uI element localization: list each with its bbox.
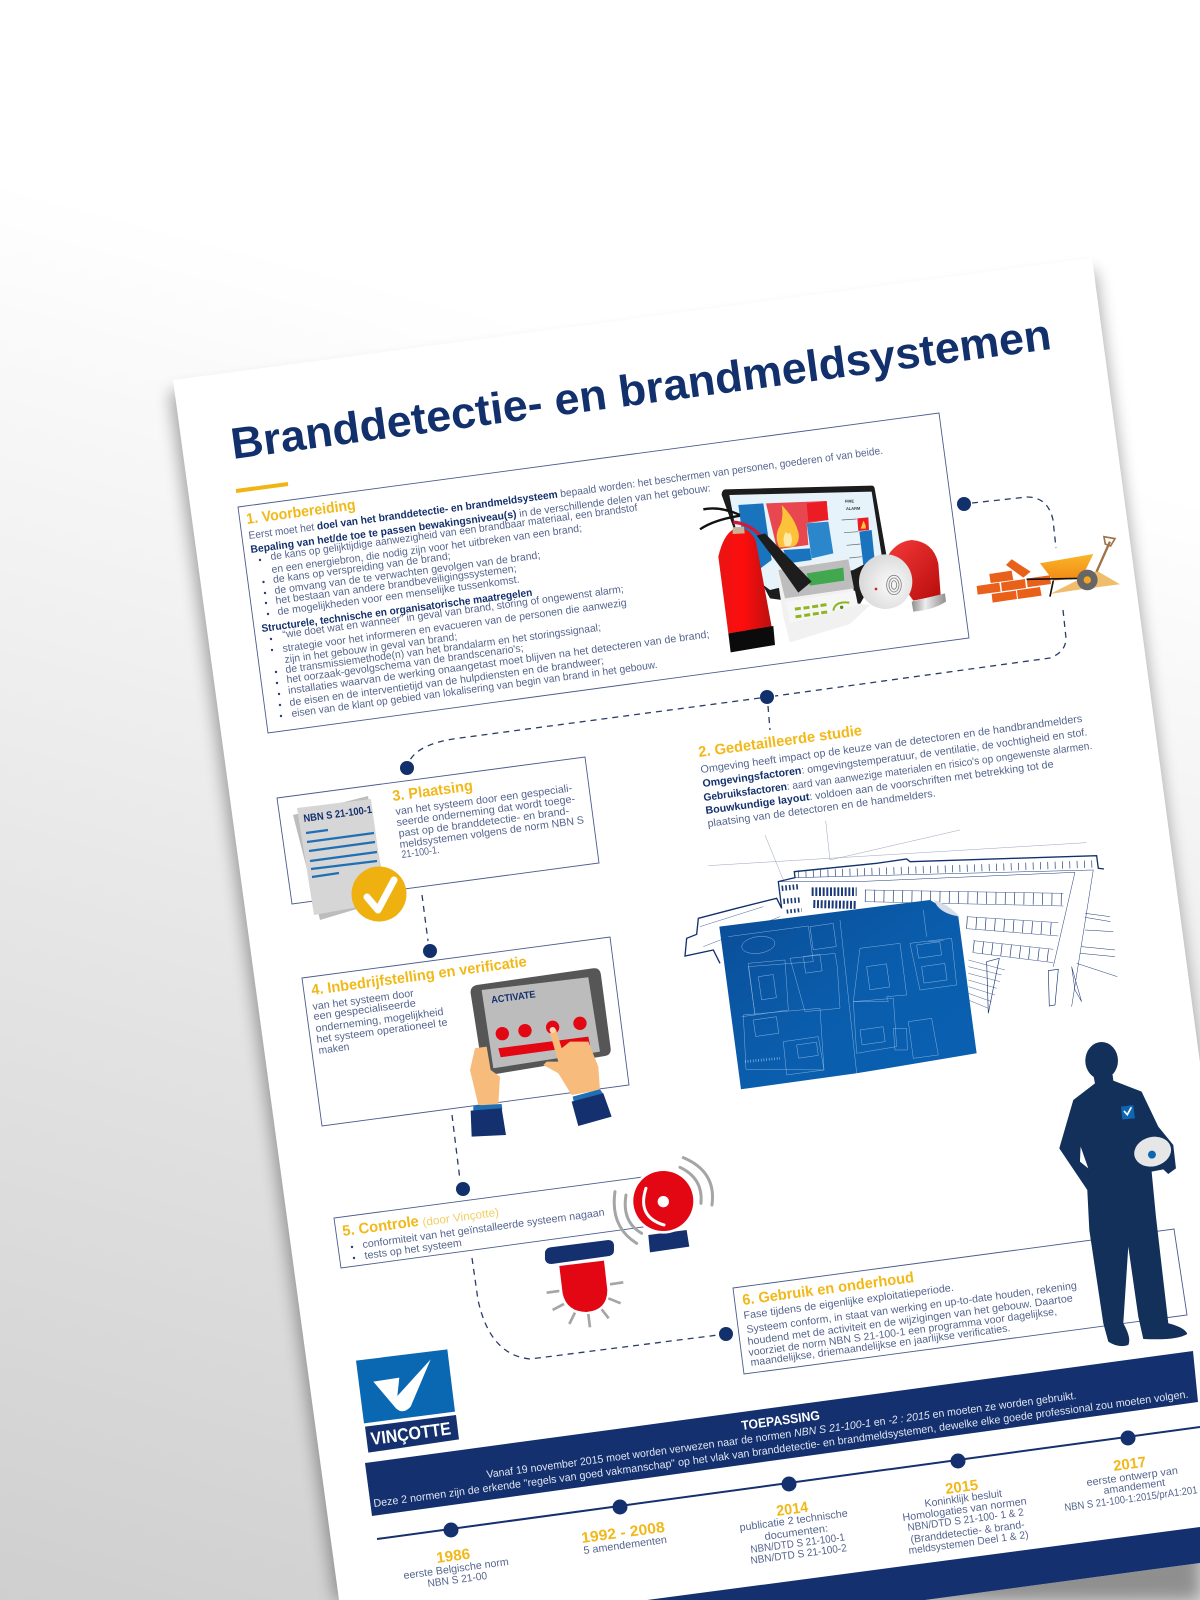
body text 3: van het systeem door een gespeciali-	[395, 782, 573, 818]
body text 1: eisen van de klant op gebied van lokalisering van begin van brand in het gebouw.	[291, 659, 658, 720]
milestone 2017: 2017	[1112, 1454, 1147, 1475]
milestone 2015	[902, 1454, 1029, 1557]
milestone 1992-2008	[580, 1500, 668, 1557]
icon: norm document with check: NBN S 21-100-1	[303, 804, 373, 825]
body text 3: 21-100-1.	[401, 844, 440, 861]
illustration: alarm monitor, extinguisher, keypad, detector, beacon: FIRE	[845, 498, 854, 504]
title: Branddetectie- en brandmeldsystemen	[228, 310, 1054, 469]
body text 6: Fase tijdens de eigenlijke exploitatieperiode.	[743, 1282, 955, 1322]
connector: step 5 to 6	[472, 1258, 718, 1359]
milestone 2014: documenten:	[764, 1523, 829, 1543]
icon: red beacon	[545, 1240, 623, 1327]
panel: 2 Gedetailleerde studie	[685, 713, 1117, 1089]
heading 3: 3. Plaatsing	[391, 777, 474, 805]
body text 1	[248, 445, 884, 720]
body text 4: een gespecialiseerde	[313, 997, 417, 1023]
poster sheet	[173, 258, 1200, 1600]
milestone 2015: 2015	[944, 1477, 979, 1498]
poster shadow	[170, 270, 1200, 1600]
connector: step 4 to 5	[452, 1115, 460, 1180]
body text 3	[395, 782, 585, 861]
icon: hands on tablet	[470, 968, 612, 1137]
body text 5: tests op het systeem	[364, 1237, 463, 1262]
body text 2: Omgeving heeft impact op de keuze van de detectoren en de handbrandmelders	[700, 713, 1083, 776]
milestone 2017: amandement	[1103, 1477, 1166, 1497]
node: step 5	[456, 1182, 470, 1196]
body text 1: de transmissiemethode(n) van het brandalarm en het storingssignaal;	[285, 622, 602, 676]
milestone 2015: (Branddetectie- & brand-	[910, 1519, 1026, 1546]
body text 1: het oorzaak-gevolgschema van de brandscenario's;	[286, 642, 524, 686]
milestone 1992-2008: 5 amendementen	[583, 1534, 668, 1557]
body text 4	[312, 987, 448, 1057]
body text 1: Eerst moet het doel van het branddetectie- en brandmeldsysteem bepaald worden: het beschermen van personen, goederen of van beide.	[248, 445, 884, 542]
heading note: (door Vinçotte)	[422, 1207, 500, 1229]
body text 2: Gebruiksfactoren: aard van aanwezige materialen en risico's op ongewenste alarmen.	[703, 740, 1093, 804]
heading 2: 2. Gedetailleerde studie	[697, 722, 863, 761]
logo: Vinçotte: VINÇOTTE	[370, 1418, 452, 1449]
node: step 6	[719, 1327, 733, 1341]
illustration: alarm monitor, extinguisher, keypad, detector, beacon: ALARM	[846, 506, 861, 511]
milestone 2014: publicatie 2 technische	[739, 1508, 849, 1534]
heading 5: 5. Controle	[341, 1213, 420, 1240]
body text 2: plaatsing van de detectoren en de handmelders.	[707, 787, 936, 830]
body text 2	[700, 713, 1093, 830]
panel: 3 Plaatsing	[277, 757, 599, 922]
body text 4: van het systeem door	[312, 987, 415, 1013]
panel: 5 Controle	[334, 1177, 650, 1268]
milestone 2015: NBN/DTD S 21-100- 1 & 2	[907, 1506, 1024, 1534]
milestone 2015: Homologaties van normen	[902, 1495, 1027, 1524]
logo: Vinçotte	[356, 1349, 459, 1453]
body text 6	[743, 1280, 1078, 1369]
connector: node and dashed line from panel 1	[957, 497, 1056, 548]
milestone 2015: Koninklijk besluit	[924, 1488, 1003, 1510]
body text 6: voorziet de norm NBN S 21-100-1 een programma voor dagelijkse,	[748, 1306, 1058, 1359]
body text 3: meldsystemen volgens de norm NBN S	[399, 814, 585, 851]
illustration: technician silhouette with helmet	[1059, 1042, 1187, 1346]
heading 1: 1. Voorbereiding	[245, 496, 357, 528]
heading 4: 4. Inbedrijfstelling en verificatie	[310, 953, 528, 999]
connector: step 3 to 4	[422, 895, 428, 941]
node: step 4	[423, 944, 437, 958]
node: step 3	[400, 761, 414, 775]
body text 3: seerde onderneming dat wordt toege-	[396, 793, 576, 829]
illustration: blueprint	[719, 900, 977, 1089]
connector: dashed line to step 2 and step 3	[410, 610, 1066, 760]
icon: norm document with check	[293, 796, 406, 922]
body text 1: de mogelijkheden voor een menselijke tussenkomst.	[277, 574, 520, 618]
body text 1: en een energiebron, die nodig zijn voor het uitbreken van een brand;	[271, 522, 583, 576]
body text 1: installaties waarvan de werking onaangetast moet blijven na het detecteren van de brand;	[287, 629, 710, 697]
banner text: Vanaf 19 november 2015 moet worden verwezen naar de normen NBN S 21-100-1 en -2 : 2015 en moeten ze worden gebruikt.	[486, 1390, 1077, 1481]
banner: Toepassing	[365, 1351, 1198, 1516]
heading 6: 6. Gebruik en onderhoud	[741, 1269, 915, 1309]
panel: 6 Gebruik en onderhoud	[733, 1229, 1187, 1374]
body text 4: maken	[318, 1041, 350, 1057]
milestone 2014: NBN/DTD S 21-100-1	[750, 1531, 846, 1556]
body text 1: Structurele, technische en organisatorische maatregelen	[261, 587, 533, 635]
illustration: alarm monitor, extinguisher, keypad, detector, beacon	[700, 486, 946, 652]
milestone 2014: NBN/DTD S 21-100-2	[750, 1542, 848, 1567]
milestone 1986: eerste Belgische norm	[403, 1556, 510, 1582]
title accent	[236, 484, 288, 491]
timeline	[377, 1427, 1200, 1590]
body text 6: houdend met de activiteit en de wijzigingen van het gebouw. Daartoe	[747, 1292, 1074, 1348]
body text 2: Omgevingsfactoren: omgevingstemperatuur, de ventilatie, de vochtigheid en stof.	[702, 726, 1088, 790]
milestone 1992-2008: 1992 - 2008	[580, 1519, 666, 1547]
milestone 1986: NBN S 21-00	[427, 1570, 488, 1590]
panel: 4 Inbedrijfstelling en verificatie	[302, 937, 629, 1137]
banner heading: TOEPASSING	[740, 1408, 821, 1433]
icon: hands on tablet: ACTIVATE	[491, 989, 537, 1006]
body text 1: strategie voor het informeren en evacueren van de personen die aanwezig	[282, 597, 627, 655]
banner text: Deze 2 normen zijn de erkende "regels van goed vakmanschap" op het vlak van branddetectie- en brandmeldsystemen, dewelke elke goede professional zou moeten volgen.	[373, 1389, 1189, 1510]
milestone 2015: meldsystemen Deel 1 & 2)	[908, 1529, 1029, 1557]
body text 1: Bepaling van het/de toe te passen bewakingsniveau(s) in de verschillende delen van het gebouw:	[250, 482, 711, 556]
panel: 1 Voorbereiding	[238, 413, 969, 733]
body text 1: “wie doet wat en wanneer” in geval van brand, storing of ongewenst alarm;	[282, 583, 624, 641]
body text 1: de kans op gelijktijdige aanwezigheid van een brandbaar materiaal, een brandstof	[270, 502, 638, 563]
milestone 2017	[1064, 1430, 1198, 1514]
footer band	[647, 1527, 1200, 1600]
body text 5: conformiteit van het geïnstalleerde systeem nagaan	[362, 1207, 605, 1251]
milestone 1986: 1986	[435, 1546, 471, 1567]
illustration: building sketch	[685, 821, 1117, 1013]
node: step 2	[760, 690, 774, 730]
body text 6: maandelijkse, driemaandelijkse en jaarlijkse verificaties.	[750, 1322, 1011, 1369]
milestone 1986	[403, 1522, 510, 1590]
body text 1: zijn in het gebouw in geval van brand;	[284, 631, 458, 666]
icon: bricks and wheelbarrow	[977, 537, 1120, 603]
icon: alarm bell	[614, 1158, 713, 1252]
milestone 2014	[739, 1476, 849, 1567]
body text 1: de omvang van de te verwachten gevolgen van de brand;	[274, 549, 541, 597]
milestone 2017: eerste ontwerp van	[1086, 1465, 1179, 1489]
body text 1: de eisen en de interventietijd van de hulpdiensten en de brandweer;	[289, 655, 605, 709]
body text 3: past op de branddetectie- en brand-	[398, 805, 570, 840]
body text 1: de kans op verspreiding van de brand;	[272, 550, 451, 586]
body text 4: het systeem operationeel te	[316, 1016, 448, 1046]
body text 2: Bouwkundige layout: voldoen aan de voorschriften met betrekking tot de	[705, 758, 1054, 817]
body text 4: onderneming, mogelijkheid	[315, 1006, 444, 1035]
body text 6: Systeem conform, in staat van werking en up-to-date houden, rekening	[746, 1280, 1078, 1336]
body text 1: het bestaan van andere brandbeveiligingssystemen;	[275, 563, 517, 607]
milestone 2014: 2014	[775, 1499, 810, 1520]
